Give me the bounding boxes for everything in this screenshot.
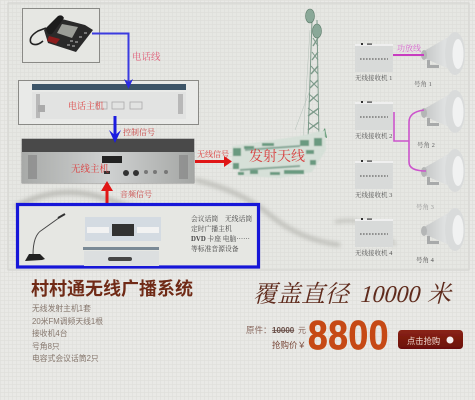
package list: 接收机4台 [32,328,68,338]
amplifier lines [393,55,426,171]
buy button [398,330,463,349]
horn 2 [417,90,465,149]
package list: 20米FM调频天线1根 [32,316,103,326]
label: 发射天线: 发射天线 [249,148,305,165]
text: source list: 等标准音源设备 [191,244,239,253]
label: 音频信号: 音频信号 [120,189,152,199]
text: source list [191,214,252,253]
package list [32,303,103,363]
receiver 3 [355,160,393,199]
coverage headline: 米 [426,281,456,308]
label: 无线接收机 3 [355,190,392,199]
horn 4 [416,208,465,264]
price block: 10000 [272,326,295,335]
horn 3 [416,149,465,211]
arrow: control signal [109,116,121,143]
arrow: audio signal [101,181,113,204]
ink wash decoration [15,180,395,245]
price block: 元 [298,326,306,335]
title: 村村通无线广播系统 [31,278,193,299]
label: 功放线: 功放线 [397,43,421,53]
text: source list: DVD 卡座 电脑······ [191,234,250,243]
coverage headline: 10000 [358,281,424,308]
equipment stack [83,217,161,266]
label: 号角 4 [416,255,435,264]
receiver 2 [355,101,393,140]
price block [246,314,389,359]
label: 无线接收机 1 [355,73,392,82]
icon: telephone [30,15,93,52]
phone box [22,8,100,62]
original price: 原件： [246,325,272,335]
arrow: wireless signal [195,156,232,167]
antenna site base [232,130,326,178]
coverage headline: 覆盖直径 [252,281,355,308]
package list: 无线发射主机1套 [32,303,91,313]
sale label: 抢购价￥ [272,340,306,350]
label: 号角 1 [414,79,432,88]
label: 控制信号: 控制信号 [123,127,155,137]
label: 电话主机: 电话主机 [68,100,104,111]
label: 无线接收机 2 [355,131,392,140]
coverage headline [252,281,456,308]
label: 无线主机: 无线主机 [71,163,110,175]
wireless host unit [22,139,194,183]
package list: 电容式会议话筒2只 [32,353,99,363]
sale price: 8800 [308,314,389,359]
text: source list: 定时广播主机 [191,224,232,233]
label: 无线信号: 无线信号 [197,149,229,159]
horn 1 [414,32,465,88]
package list: 号角8只 [32,341,60,351]
receiver 1 [355,43,393,82]
text: source list: 会议话筒 无线话筒 [191,214,252,223]
label: 号角 2 [417,140,435,149]
panel: audio sources [18,204,258,267]
arrow: telephone line [92,34,133,89]
icon: gooseneck microphone [25,214,65,261]
label: 号角 3 [416,202,434,211]
button label: 点击抢购 [407,336,440,346]
label: 无线接收机 4 [355,248,393,257]
panel: system diagram [8,3,469,270]
receiver 4 [355,218,393,257]
icon: button dot [446,336,454,344]
label: 电话线: 电话线 [132,51,161,63]
telephone host unit [18,80,198,124]
icon: transmitting tower [295,9,327,140]
